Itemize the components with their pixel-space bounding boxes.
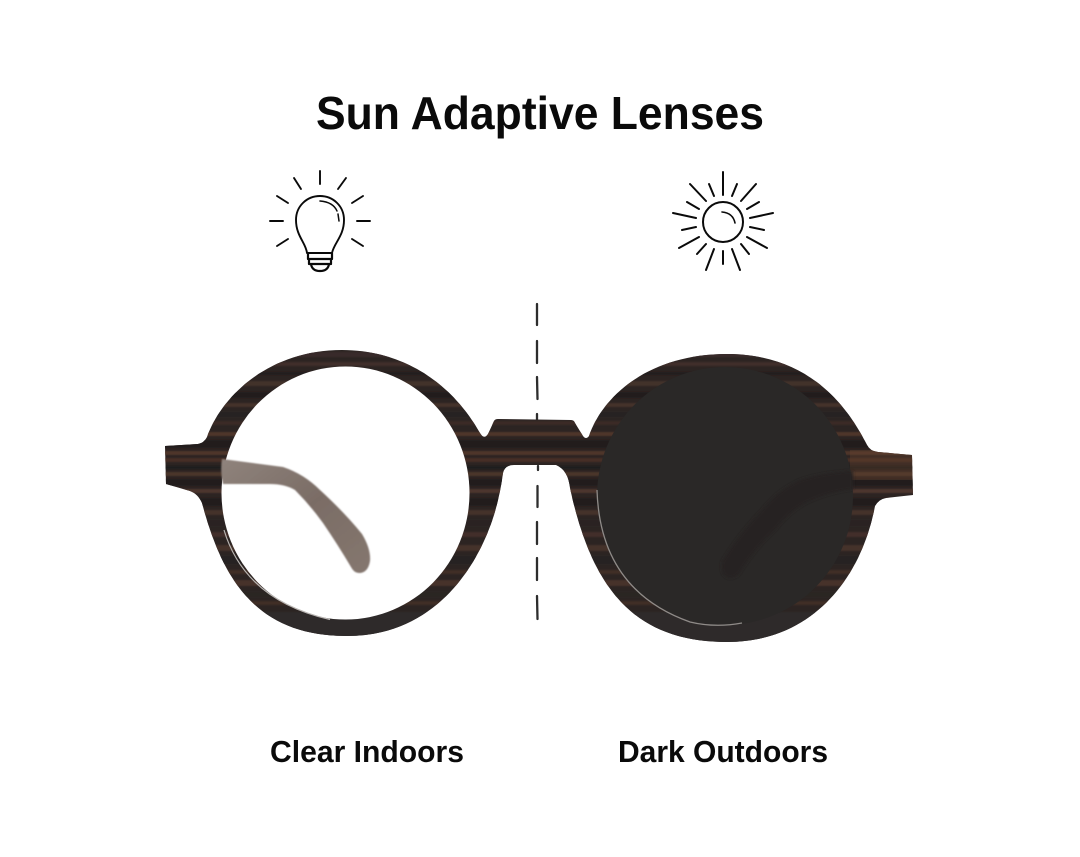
right lens: dark: [597, 367, 853, 625]
temple arm shadow through dark lens: [722, 471, 853, 578]
temple arm seen through clear lens: [221, 459, 370, 573]
right temple warm tone: [850, 450, 920, 480]
label: clear indoors: Clear Indoors: [270, 734, 464, 769]
icon: light bulb: [270, 171, 370, 271]
icon: sun: [673, 172, 773, 270]
left lens: clear: [221, 366, 470, 620]
label: dark outdoors: Dark Outdoors: [618, 734, 828, 769]
infographic: sun adaptive lenses: [165, 96, 913, 762]
divider: dashed centre line: [537, 304, 538, 619]
title: Sun Adaptive Lenses: [316, 87, 764, 139]
frame: wood texture: [160, 345, 920, 645]
glasses: [160, 345, 920, 645]
